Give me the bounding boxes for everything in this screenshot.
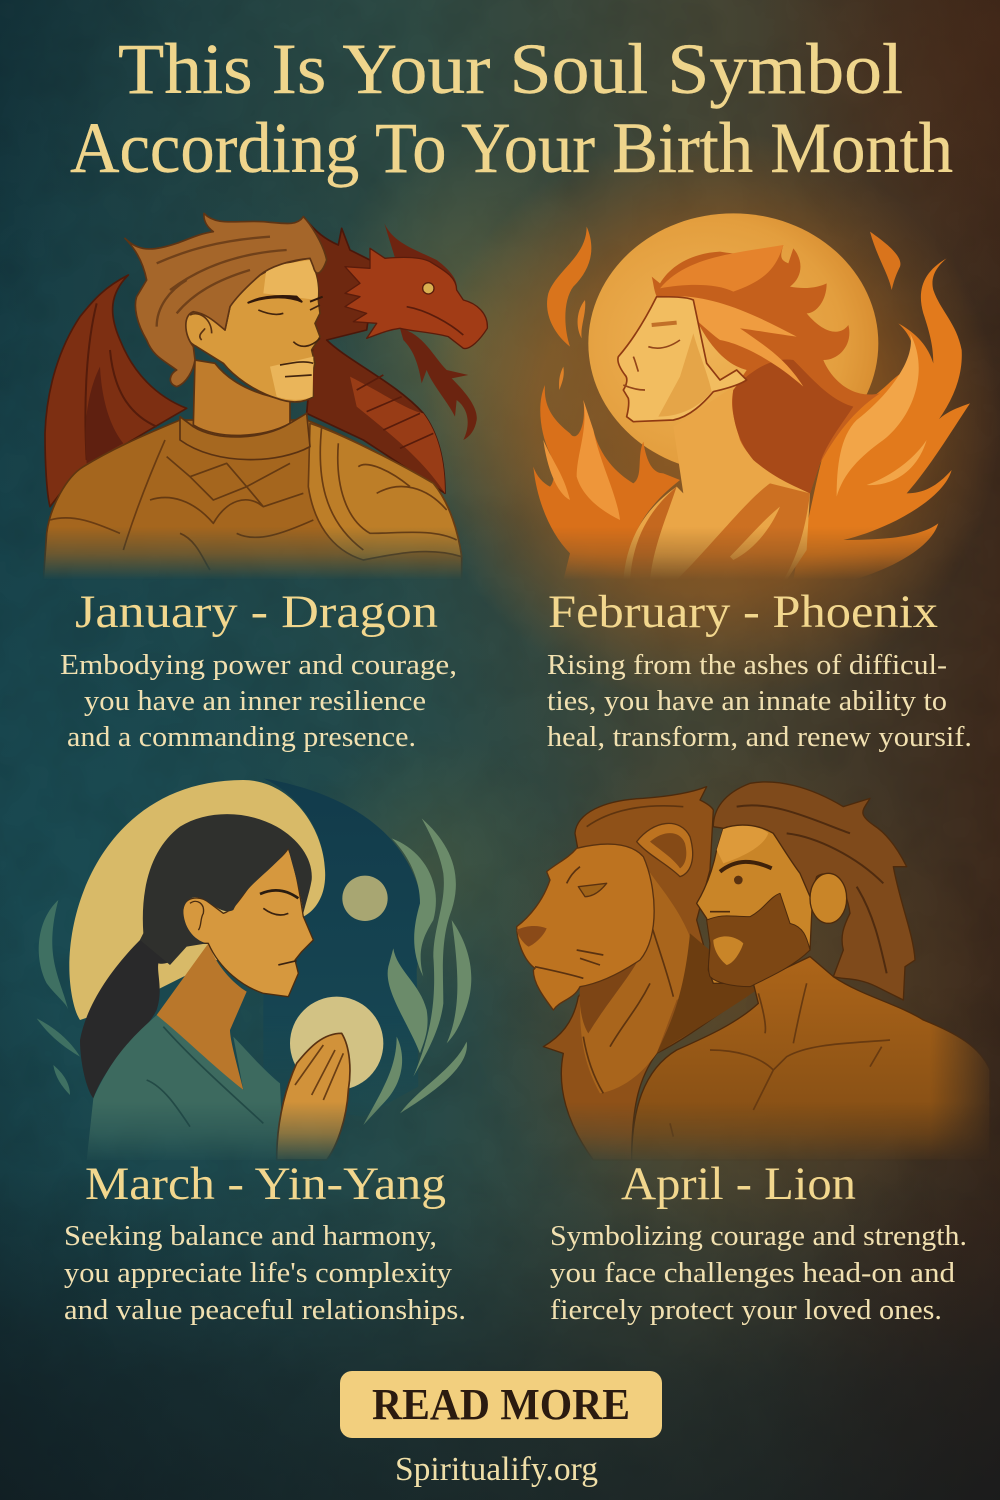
heading: March: March - Yin-Yang — [85, 1158, 446, 1210]
man hair — [713, 782, 915, 1000]
title — [70, 29, 953, 188]
heading: January: January - Dragon — [75, 586, 438, 638]
icon: lion ear — [637, 823, 693, 877]
heading: April: April - Lion — [621, 1158, 856, 1210]
button: read more: READ MORE — [372, 1380, 630, 1429]
man hair — [125, 213, 327, 387]
icon: leaves left — [37, 900, 80, 1095]
neck — [157, 943, 247, 1090]
armored torso — [43, 420, 462, 580]
icon: flames right — [793, 232, 970, 580]
icon: leaves right — [363, 818, 471, 1125]
woman neck and chest — [624, 457, 810, 576]
text block: April — [550, 1220, 967, 1326]
face — [182, 848, 313, 997]
panel: January dragon illustration — [43, 213, 487, 580]
footer: site name: Spiritualify.org — [395, 1451, 598, 1488]
text block: April: fiercely protect your loved ones. — [550, 1294, 942, 1326]
text block: January: Embodying power and courage, — [60, 649, 457, 681]
icon: large moon dot — [290, 997, 383, 1090]
robe — [87, 1015, 283, 1160]
icon: dragon wing — [45, 275, 187, 507]
icon: lion mane — [543, 787, 757, 1160]
text block: February: Rising from the ashes of difficul- — [547, 649, 947, 681]
woman face — [618, 297, 747, 422]
text block: February: heal, transform, and renew yoursif. — [547, 721, 972, 753]
text block: March: Seeking balance and harmony, — [64, 1220, 437, 1252]
panel: February phoenix illustration — [533, 213, 970, 580]
text block: January: you have an inner resilience — [84, 685, 426, 717]
icon: dragon neck and body — [303, 217, 445, 493]
text block: April: you face challenges head-on and — [550, 1257, 956, 1289]
text block: January — [60, 649, 457, 753]
text block: February: ties, you have an innate ability to — [547, 685, 947, 717]
man face — [184, 258, 323, 402]
icon: small moon dot — [342, 876, 388, 921]
panel: March yin-yang illustration — [37, 778, 471, 1160]
icon: dragon head — [345, 223, 487, 440]
collar and neck — [180, 360, 310, 460]
man torso — [632, 957, 990, 1160]
title: This Is Your Soul Symbol — [118, 29, 903, 109]
man face — [697, 825, 813, 987]
icon: lion face — [517, 844, 654, 1010]
praying hands — [277, 1033, 350, 1160]
robe — [630, 483, 810, 580]
button: read more — [340, 1371, 662, 1438]
panel: April lion illustration — [517, 782, 990, 1160]
text block: March — [64, 1220, 466, 1326]
text block: April: Symbolizing courage and strength. — [550, 1220, 967, 1252]
icon: yin-yang light half — [69, 780, 325, 1020]
icon: flames left — [533, 227, 680, 580]
woman hair — [652, 245, 880, 493]
ponytail — [80, 933, 168, 1098]
text block: March: and value peaceful relationships. — [64, 1294, 466, 1326]
icon: sun disc — [588, 213, 878, 473]
text block: March: you appreciate life's complexity — [64, 1257, 453, 1289]
text block: January: and a commanding presence. — [67, 721, 416, 753]
text block: February — [547, 649, 972, 753]
heading: February: February - Phoenix — [548, 586, 938, 638]
icon: yin-yang dark half — [264, 778, 420, 1084]
title: According To Your Birth Month — [70, 108, 953, 188]
man ear — [810, 873, 847, 923]
hair — [140, 814, 312, 965]
